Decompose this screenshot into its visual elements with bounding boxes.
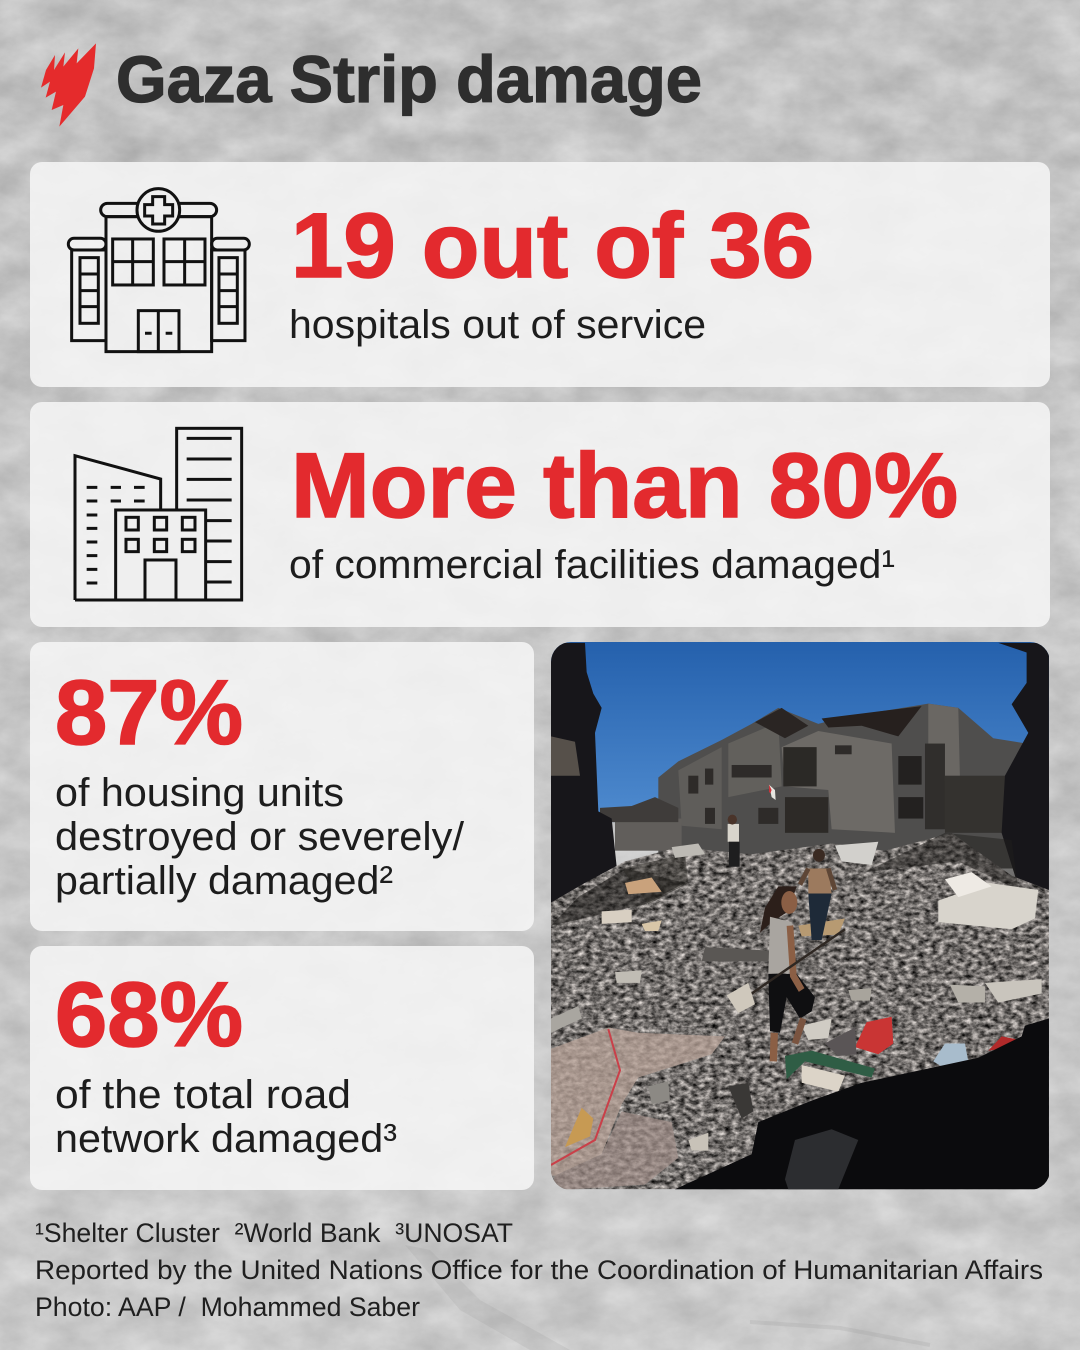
- photo credit: Photo: AAP / Mohammed Saber: [35, 1292, 420, 1322]
- figure: man in background: [728, 815, 740, 867]
- stat: 87%: 87%: [55, 662, 243, 764]
- text: housing units description: of housing units: [55, 771, 344, 815]
- photo: girl walking through rubble below damaged buildings: [551, 640, 1049, 1194]
- damaged apartment block: [600, 704, 1049, 869]
- text: of commercial facilities damaged: of commercial facilities damaged¹: [289, 543, 895, 587]
- stat: 19 out of 36: 19 out of 36: [291, 195, 814, 297]
- text: road network description: [55, 1073, 397, 1161]
- right ruined building: [998, 643, 1049, 890]
- panel: housing units: [30, 642, 534, 931]
- clothes pile: [785, 1017, 1020, 1092]
- panel: hospitals: [30, 162, 1050, 387]
- carpet: [551, 1027, 725, 1176]
- text: housing units description: destroyed or severely/: [55, 815, 465, 859]
- figure: boy: [800, 849, 835, 940]
- rubble field: [551, 826, 1049, 1194]
- text: hospitals out of service: hospitals out of service: [289, 303, 706, 347]
- text: housing units description: [55, 771, 465, 903]
- sources: ¹Shelter Cluster ²World Bank ³UNOSAT: [35, 1218, 513, 1248]
- figure: girl: [727, 886, 845, 1061]
- text: road network description: network damaged³: [55, 1117, 397, 1161]
- panel: commercial facilities: [30, 402, 1050, 627]
- left ruined building: [551, 643, 618, 904]
- stat: 68%: 68%: [55, 964, 243, 1066]
- logo: red SBS flame: [41, 43, 96, 127]
- dark foreground shadow: [675, 1019, 1049, 1189]
- panel: road network: [30, 946, 534, 1190]
- text: housing units description: partially damaged²: [55, 859, 393, 903]
- reporting credit: Reported by the United Nations Office for the Coordination of Humanitarian Affairs: [35, 1255, 1043, 1285]
- sky: [551, 640, 1049, 822]
- icon: buildings: [75, 428, 242, 600]
- text: road network description: of the total road: [55, 1073, 351, 1117]
- icon: hospital: [68, 189, 249, 352]
- footnotes: [35, 1218, 1043, 1322]
- stat: more than 80%: More than 80%: [291, 435, 958, 537]
- title: Gaza Strip damage: [116, 42, 702, 116]
